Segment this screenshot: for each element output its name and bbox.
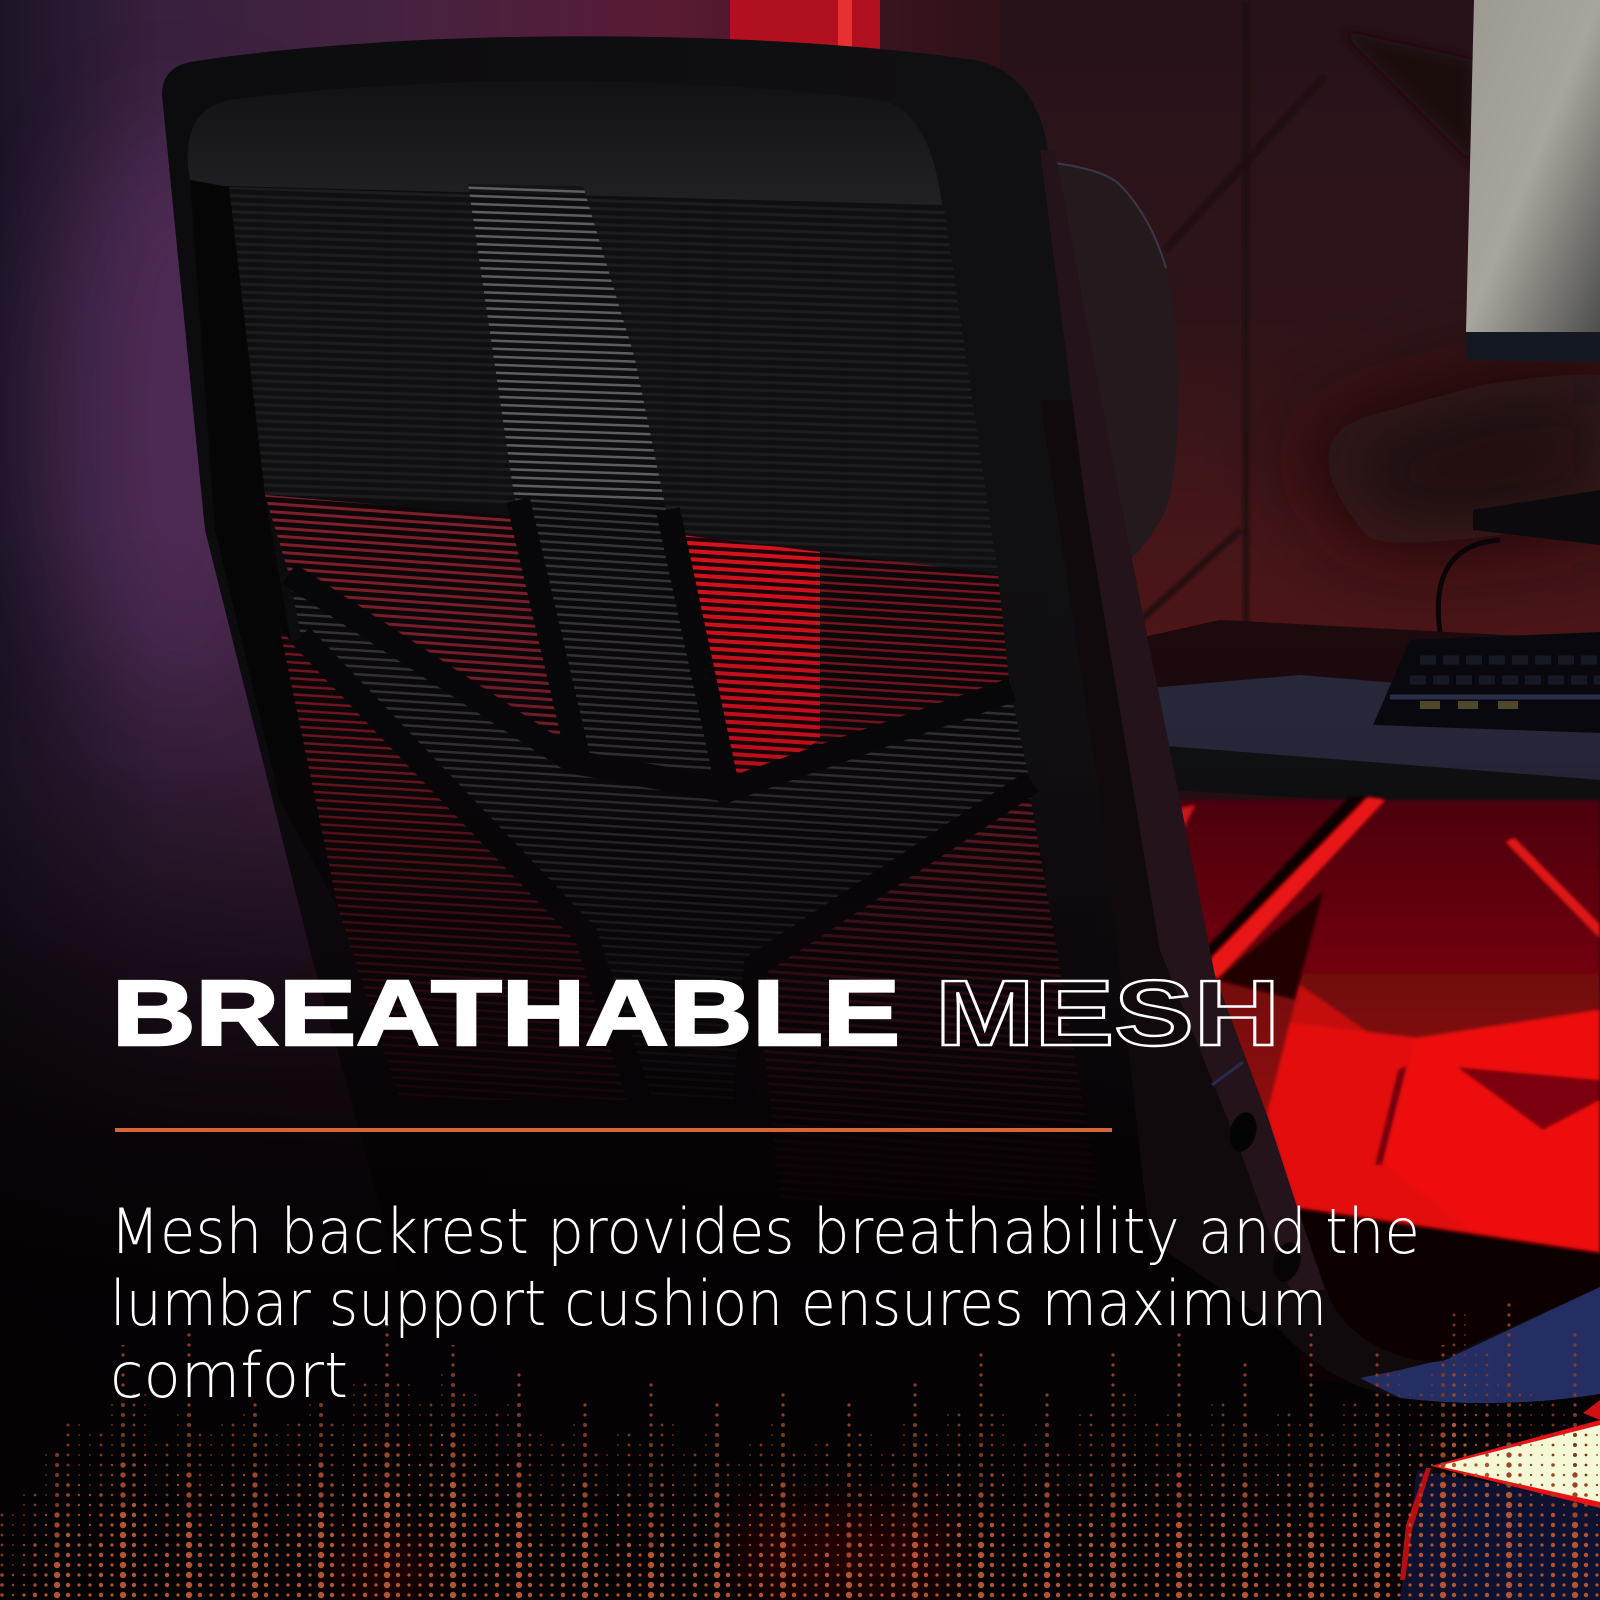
dark gradient behind the text bbox=[0, 520, 1600, 1600]
body text: Mesh backrest provides breathability and the bbox=[110, 1195, 1420, 1268]
title word: BREATHABLE: BREATHABLE bbox=[112, 961, 900, 1065]
title word: MESH outlined: MESH bbox=[935, 961, 1280, 1065]
body text: comfort bbox=[110, 1339, 348, 1412]
mesh back left red panel bbox=[265, 495, 640, 1100]
dim glow behind bottom dots bbox=[340, 1510, 950, 1600]
chair headrest cushion bbox=[1050, 163, 1179, 565]
chair back frame bbox=[162, 36, 1600, 1420]
body text: lumbar support cushion ensures maximum bbox=[110, 1267, 1327, 1340]
base: blue lit chair arm and glowing light strip bbox=[1360, 1287, 1600, 1600]
orange divider rule bbox=[115, 1128, 1112, 1132]
background: angular wall panels bbox=[1130, 0, 1600, 630]
desk and keyboard bbox=[1130, 490, 1600, 815]
body text bbox=[110, 1195, 1420, 1412]
mesh back upper panel bbox=[190, 180, 998, 908]
title: BREATHABLE MESH bbox=[112, 961, 1280, 1065]
red lit wall and floor bbox=[1160, 797, 1600, 1400]
mesh grey centre with support bands bbox=[289, 495, 1032, 1100]
halftone dot skyline pattern bbox=[0, 1233, 1600, 1600]
monitor bbox=[1466, 0, 1600, 362]
chair frame lower edge and adjustment knobs bbox=[1040, 150, 1600, 1403]
mesh back right red panel bbox=[674, 534, 1100, 1200]
